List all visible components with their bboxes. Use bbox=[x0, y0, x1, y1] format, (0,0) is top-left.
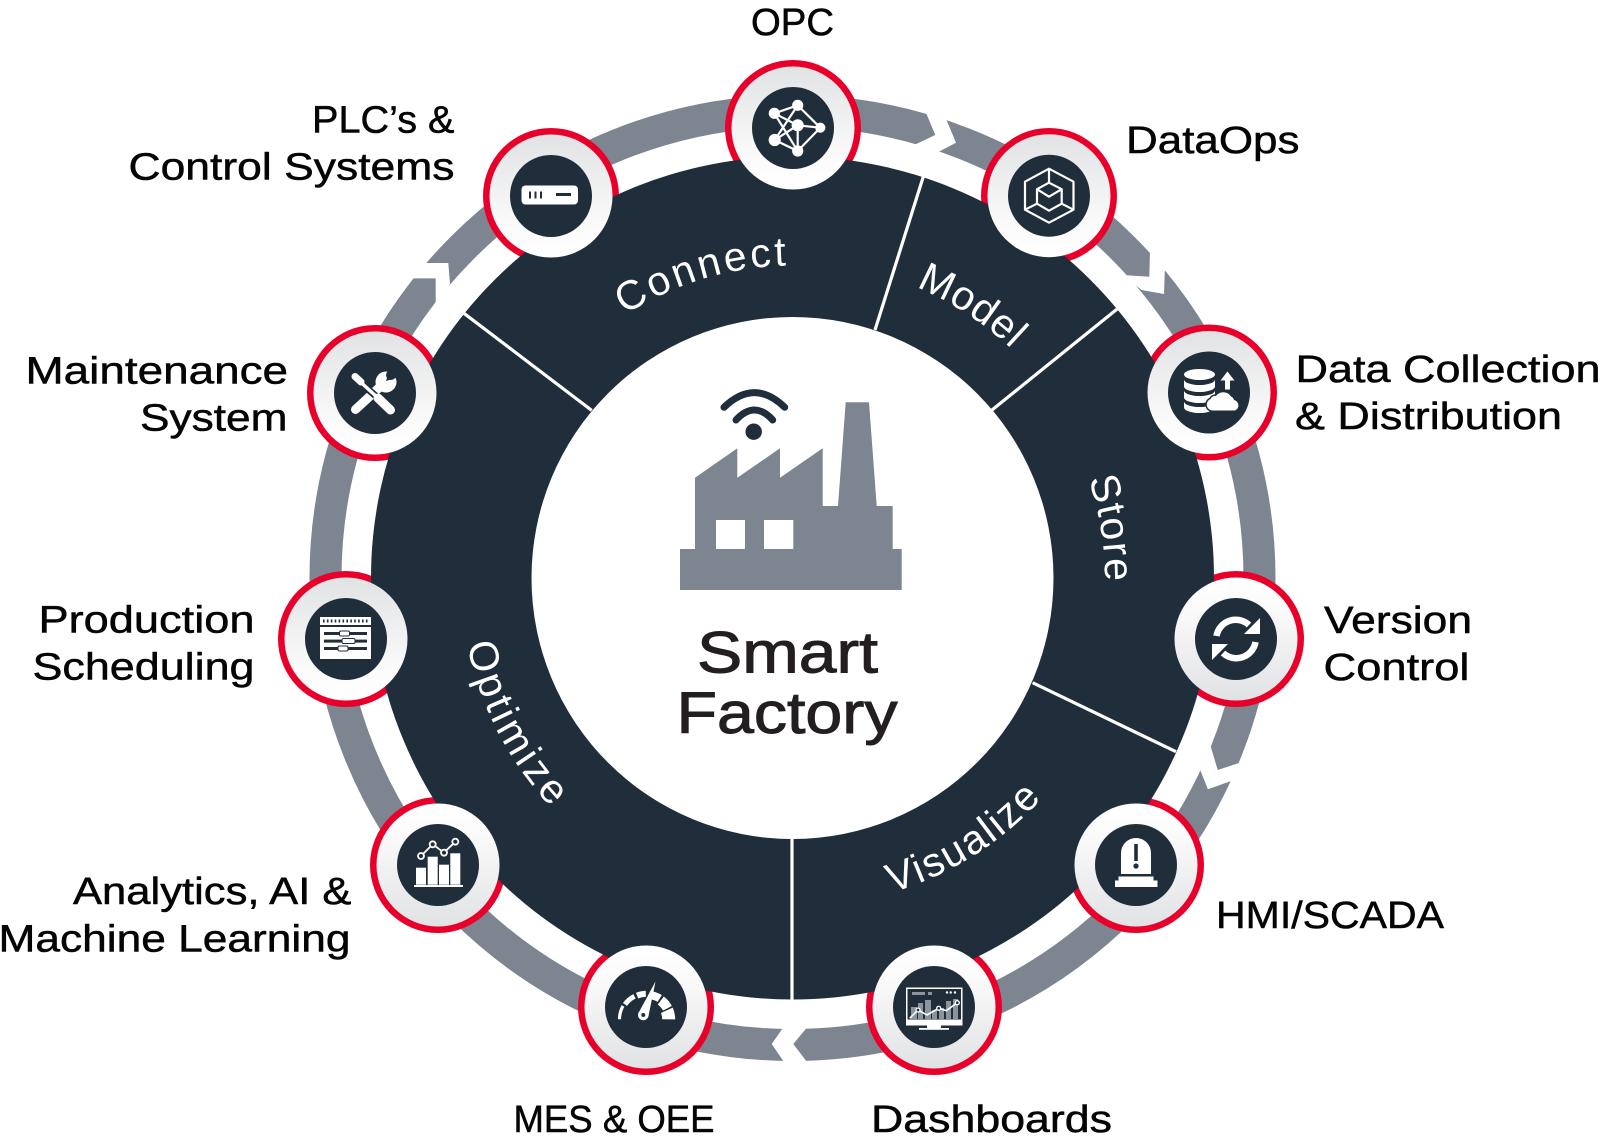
stage label: Store: Store bbox=[1091, 476, 1127, 580]
label: Production Scheduling: Production bbox=[38, 600, 254, 642]
label: Version Control bbox=[1324, 600, 1472, 689]
stage label: Model: Model bbox=[919, 262, 1030, 347]
label: PLC's & Control Systems: PLC’s & bbox=[312, 100, 454, 142]
label: Data Collection & Distribution: Data Collection bbox=[1296, 349, 1600, 391]
node: PLC bbox=[490, 134, 612, 258]
icon: sync arrows bbox=[1212, 618, 1260, 660]
label: Version Control: Version bbox=[1324, 600, 1472, 642]
label: PLC's & Control Systems bbox=[128, 100, 454, 188]
center title bbox=[676, 620, 898, 746]
label: Analytics, AI & Machine Learning bbox=[0, 871, 352, 960]
node: Dashboards bbox=[872, 946, 996, 1068]
label: Maintenance System: System bbox=[140, 398, 288, 440]
dark wheel with stage segments bbox=[371, 160, 1214, 1000]
icon: database and cloud bbox=[1184, 369, 1238, 413]
icon: gauge bbox=[619, 982, 669, 1020]
label: Production Scheduling: Scheduling bbox=[32, 646, 254, 688]
label: Analytics, AI & Machine Learning: Analytics, AI & bbox=[73, 871, 352, 913]
icon: alarm beacon bbox=[1115, 838, 1158, 887]
node: Analytics bbox=[376, 804, 500, 926]
icon: bars and trend line bbox=[414, 839, 463, 887]
label: PLC's & Control Systems: Control Systems bbox=[128, 146, 454, 188]
node: Data Collection bbox=[1148, 331, 1270, 454]
outer cycle ring with chevron arrows bbox=[326, 108, 1260, 1066]
label: Maintenance System: Maintenance bbox=[26, 350, 288, 392]
label: Data Collection & Distribution: & Distribution bbox=[1295, 396, 1562, 438]
icon: controller unit bbox=[522, 186, 578, 204]
label: HMI/SCADA: HMI/SCADA bbox=[1216, 895, 1445, 937]
label: DataOps: DataOps bbox=[1126, 120, 1300, 162]
label: Version Control: Control bbox=[1324, 647, 1470, 689]
icon: cube in hexagon bbox=[1025, 169, 1074, 223]
node: DataOps bbox=[988, 134, 1110, 257]
stage label: Visualize: Visualize bbox=[882, 788, 1038, 890]
node: OPC bbox=[732, 66, 854, 190]
icon: schedule board bbox=[320, 617, 371, 659]
node: Version Control bbox=[1174, 578, 1298, 700]
icon: monitor with chart bbox=[906, 988, 962, 1030]
node: Production Scheduling bbox=[284, 578, 408, 700]
label: OPC: OPC bbox=[751, 2, 834, 44]
center icon: factory with wifi bbox=[680, 393, 902, 590]
label: Maintenance System bbox=[26, 350, 288, 440]
label: Analytics, AI & Machine Learning: Machine Learning bbox=[0, 918, 350, 960]
label: MES & OEE: MES & OEE bbox=[514, 1099, 714, 1141]
red node rings bbox=[278, 60, 1304, 1075]
icon: wrench and screwdriver bbox=[355, 369, 399, 410]
node: Maintenance System bbox=[314, 332, 436, 454]
center title: Factory bbox=[676, 681, 898, 746]
center title: Smart bbox=[697, 620, 878, 686]
node: MES & OEE bbox=[584, 946, 708, 1068]
label: Production Scheduling bbox=[32, 600, 254, 688]
node: HMI/SCADA bbox=[1074, 804, 1198, 926]
icon: network bbox=[770, 101, 824, 156]
stage label: Connect: Connect bbox=[616, 239, 786, 310]
label: Data Collection & Distribution bbox=[1295, 349, 1600, 438]
stage label: Optimize: Optimize bbox=[468, 642, 562, 803]
label: Dashboards: Dashboards bbox=[871, 1099, 1112, 1141]
